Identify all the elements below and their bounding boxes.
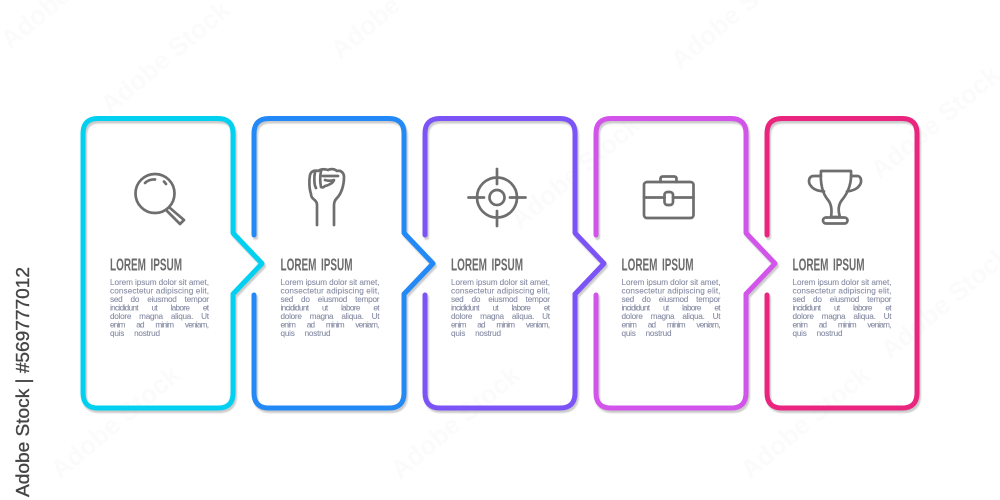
text block 5: quis nostrud [792,329,843,338]
text block 3: enim ad minim veniam, [451,320,550,330]
text block 5 [792,278,892,338]
icon: trophy [809,171,861,224]
text block 4: enim ad minim veniam, [622,320,720,330]
panel 3: target [425,118,606,410]
text block 1: enim ad minim veniam, [110,320,209,330]
text block 4: consectetur adipiscing elit, [622,286,720,296]
heading 2: LOREM IPSUM [280,254,352,274]
text block 2: consectetur adipiscing elit, [280,286,380,296]
text block 5: consectetur adipiscing elit, [792,286,892,296]
text block 3: quis nostrud [451,329,501,338]
text block 2: dolore magna aliqua. Ut [280,312,380,321]
text block 4: quis nostrud [622,329,672,338]
heading 4: LOREM IPSUM [622,254,694,274]
infographic: Adobe Stock [505,109,646,235]
text block 5: incididunt ut labore et [792,304,892,312]
text block 1: incididunt ut labore et [110,304,210,312]
panel 5: trophy [767,118,918,410]
icon: magnifying glass [136,174,184,224]
panel 1: search [83,118,264,410]
text block 4: sed do eiusmod tempor [622,295,721,304]
text block 1: Lorem ipsum dolor sit amet, [110,278,209,287]
text block 3: consectetur adipiscing elit, [451,286,550,296]
text block 3 [451,278,551,338]
heading 5: LOREM IPSUM [792,254,864,274]
panel 4: briefcase [596,118,776,410]
heading 1: LOREM IPSUM [110,254,182,274]
text block 1 [110,278,210,338]
text block 5: Lorem ipsum dolor sit amet, [792,278,892,287]
text block 5: enim ad minim veniam, [792,320,892,330]
heading 3: LOREM IPSUM [451,254,523,274]
text block 4 [622,278,721,338]
text block 5: sed do eiusmod tempor [792,295,892,304]
text block 4: dolore magna aliqua. Ut [622,312,721,321]
infographic: Adobe Stock [385,359,526,485]
text block 2: incididunt ut labore et [280,304,380,312]
text block 5: dolore magna aliqua. Ut [792,312,892,321]
text block 2: quis nostrud [280,329,331,338]
icon: raised fist [309,169,344,225]
text block 3: sed do eiusmod tempor [451,295,550,304]
text block 2: sed do eiusmod tempor [280,295,380,304]
text block 3: dolore magna aliqua. Ut [451,312,551,321]
stock id caption: Adobe Stock | #569777012 [13,267,33,497]
text block 1: quis nostrud [110,329,160,338]
text block 1: sed do eiusmod tempor [110,295,209,304]
infographic: Adobe Stock [735,359,876,485]
text block 3: incididunt ut labore et [451,304,551,312]
text block 2: enim ad minim veniam, [280,320,380,330]
icon: crosshair target [468,169,526,226]
text block 1: consectetur adipiscing elit, [110,286,209,296]
text block 4: incididunt ut labore et [622,304,721,312]
text block 1: dolore magna aliqua. Ut [110,312,210,321]
text block 3: Lorem ipsum dolor sit amet, [451,278,550,287]
text block 2: Lorem ipsum dolor sit amet, [280,278,380,287]
text block 2 [280,278,380,338]
icon: briefcase [644,176,694,218]
infographic: Adobe Stock [45,359,186,485]
panel 2: strength [254,118,434,410]
text block 4: Lorem ipsum dolor sit amet, [622,278,720,287]
